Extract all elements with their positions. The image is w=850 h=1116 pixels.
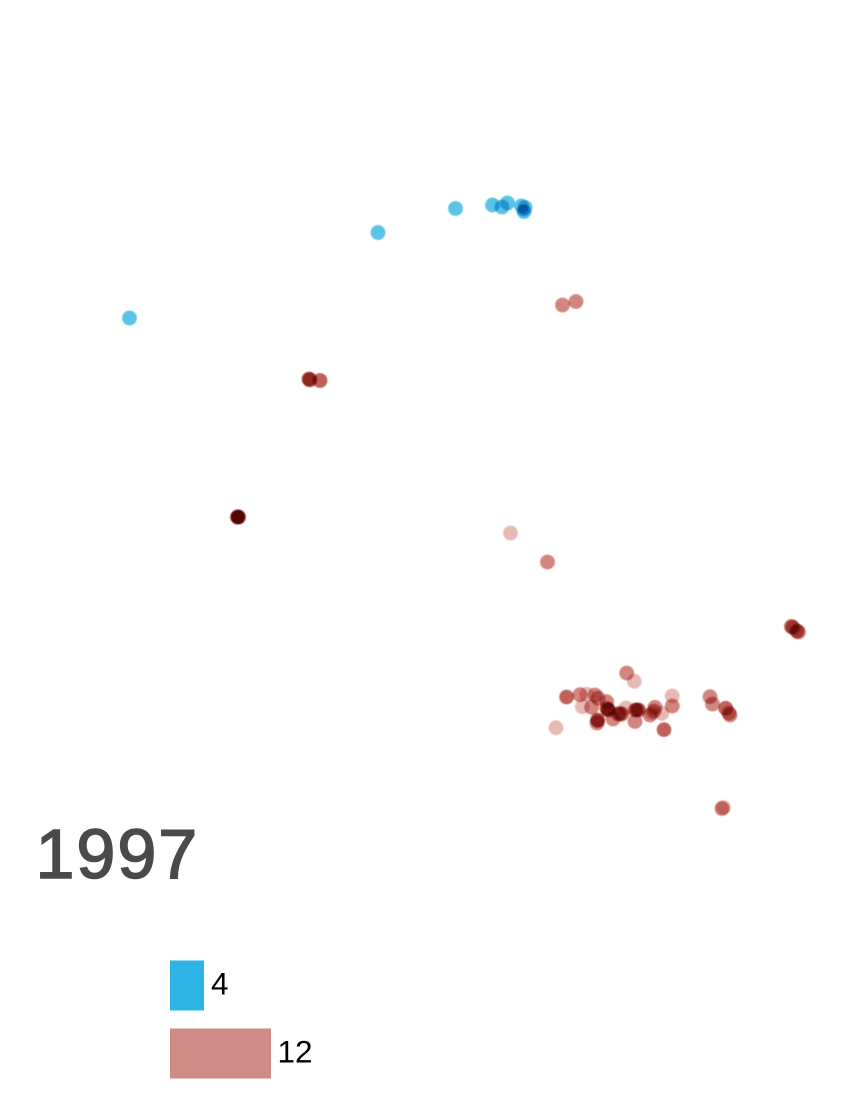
red dots: right of main cluster xyxy=(703,689,737,722)
year title: 1997 xyxy=(36,815,199,893)
red dots: eastern pair xyxy=(784,619,806,639)
red dots: main southern cluster xyxy=(549,666,680,737)
blue dots: northern cluster xyxy=(122,196,532,325)
legend: blue bar with value xyxy=(170,960,229,1010)
legend: blue bar with value: 4 xyxy=(211,966,229,1002)
legend: red bar with value xyxy=(170,1028,313,1078)
red dots: upper scattered points xyxy=(230,294,583,569)
legend: red bar with value: 12 xyxy=(278,1034,313,1070)
red dots: southern outlier xyxy=(715,800,731,816)
